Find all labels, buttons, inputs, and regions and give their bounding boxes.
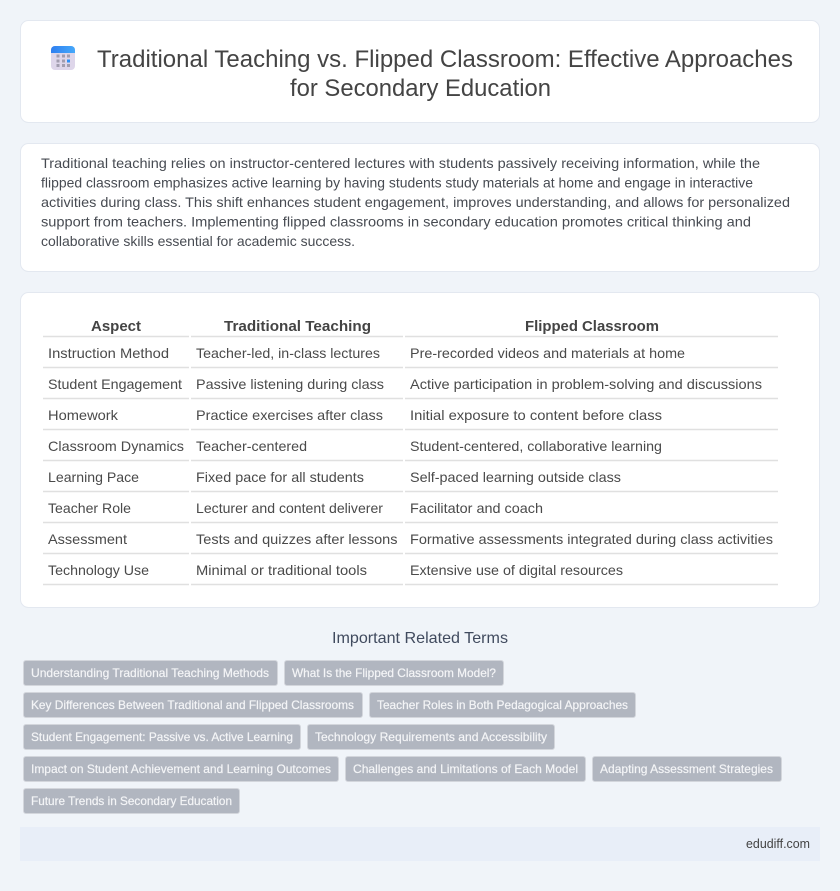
row: homework (48, 407, 662, 423)
text block: summary paragraph: flipped classroom emphasizes active learning by having students study materials at home and engage in interactive (41, 174, 753, 190)
title: Traditional Teaching vs. Flipped Classroom: Effective Approaches (97, 46, 793, 73)
row: classroom dynamics (48, 438, 662, 454)
row: instruction method: Instruction Method (48, 345, 169, 361)
tag: Future Trends in Secondary Education (31, 794, 232, 808)
tag: What Is the Flipped Classroom Model? (292, 666, 496, 680)
panel: title header (20, 20, 820, 122)
tag (346, 756, 586, 782)
row: classroom dynamics: Student-centered, collaborative learning (410, 438, 662, 454)
tag: Teacher Roles in Both Pedagogical Approaches (377, 698, 628, 712)
row: classroom dynamics: Classroom Dynamics (48, 438, 184, 454)
footer: edudiff.com (746, 837, 810, 851)
row: learning pace: Learning Pace (48, 469, 139, 485)
row: student engagement (48, 376, 762, 392)
row: assessment (48, 531, 773, 547)
row: learning pace: Fixed pace for all students (196, 469, 364, 485)
row: homework: Homework (48, 407, 119, 423)
row: classroom dynamics: Teacher-centered (196, 438, 307, 454)
footer (20, 827, 820, 861)
table header (91, 319, 659, 335)
icon: calendar (51, 46, 75, 70)
tag (24, 756, 338, 782)
panel: comparison table (20, 292, 820, 608)
table header: Traditional Teaching (224, 319, 371, 335)
table header: Aspect (91, 319, 141, 335)
tag: Challenges and Limitations of Each Model (353, 762, 578, 776)
row: homework: Practice exercises after class (196, 407, 383, 423)
row: student engagement: Student Engagement (48, 376, 182, 392)
tag (24, 660, 278, 686)
tag (592, 756, 782, 782)
row: instruction method: Pre-recorded videos and materials at home (410, 345, 685, 361)
text block: summary paragraph: activities during class. This shift enhances student engagement, improves understanding, and allows for personalized (41, 194, 790, 210)
text block: summary paragraph: Traditional teaching relies on instructor-centered lectures with students passively receiving information, while the (41, 155, 760, 171)
tag: Key Differences Between Traditional and Flipped Classrooms (31, 698, 354, 712)
tag (308, 724, 554, 750)
row: technology use: Technology Use (48, 562, 149, 578)
text block: summary paragraph: support from teachers. Implementing flipped classrooms in secondary education promotes critical thinking and (41, 214, 751, 230)
tag: Understanding Traditional Teaching Methods (31, 666, 269, 680)
row: assessment: Formative assessments integrated during class activities (410, 531, 773, 547)
row: technology use: Extensive use of digital resources (410, 562, 623, 578)
row: student engagement: Passive listening during class (196, 376, 384, 392)
text block: summary paragraph: collaborative skills essential for academic success. (41, 233, 355, 249)
row: instruction method (48, 345, 685, 361)
row: teacher role (48, 500, 543, 516)
row: technology use (48, 562, 623, 578)
tag (24, 788, 240, 814)
tag: Impact on Student Achievement and Learning Outcomes (31, 762, 331, 776)
row: teacher role: Lecturer and content deliverer (196, 500, 383, 516)
row: learning pace: Self-paced learning outside class (410, 469, 621, 485)
row: learning pace (48, 469, 621, 485)
row: student engagement: Active participation in problem-solving and discussions (410, 376, 762, 392)
row: teacher role: Facilitator and coach (410, 500, 543, 516)
table header: Flipped Classroom (525, 319, 659, 335)
row: homework: Initial exposure to content before class (410, 407, 662, 423)
heading: important related terms: Important Related Terms (332, 630, 508, 647)
row: assessment: Tests and quizzes after lessons (196, 531, 398, 547)
title: for Secondary Education (290, 75, 551, 102)
panel: related term tags (24, 660, 782, 814)
tag: Student Engagement: Passive vs. Active Learning (31, 730, 293, 744)
row: teacher role: Teacher Role (48, 500, 131, 516)
row: technology use: Minimal or traditional tools (196, 562, 367, 578)
row: instruction method: Teacher-led, in-class lectures (196, 345, 380, 361)
row: assessment: Assessment (48, 531, 127, 547)
tag: Technology Requirements and Accessibility (315, 730, 547, 744)
text block: summary paragraph (41, 155, 790, 249)
tag (284, 660, 504, 686)
tag (24, 724, 300, 750)
title (97, 46, 793, 102)
tag (370, 692, 636, 718)
panel: summary (20, 144, 820, 272)
tag: Adapting Assessment Strategies (600, 762, 773, 776)
tag (24, 692, 362, 718)
